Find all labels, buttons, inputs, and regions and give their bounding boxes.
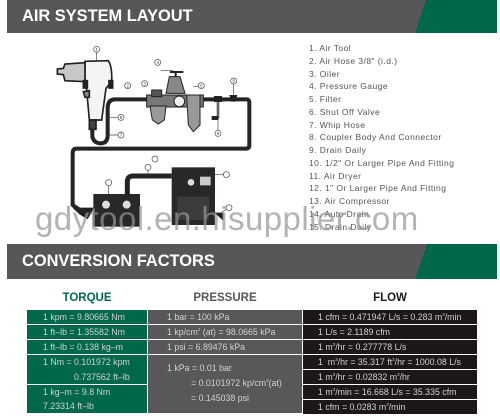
parts list: 13. Air Compressor	[309, 196, 390, 206]
table: pressure: 1 bar = 100 kPa	[167, 312, 229, 322]
callout numbers	[94, 46, 237, 213]
parts list: 9. Drain Daily	[309, 145, 366, 155]
heading: pressure: PRESSURE	[193, 292, 257, 304]
header: air system layout: AIR SYSTEM LAYOUT	[22, 7, 193, 25]
parts list: 11. Air Dryer	[309, 170, 361, 180]
parts list: 3. Oiler	[309, 68, 340, 78]
header: air system layout	[7, 0, 497, 33]
parts list	[309, 43, 454, 232]
table: pressure: 1 kPa = 0.01 bar	[167, 363, 232, 373]
whip hose and air hose	[73, 99, 249, 210]
callout numbers: 7	[120, 133, 123, 138]
watermark: gdytool.en.hisupplier.com	[35, 200, 419, 237]
table: flow: 1 m3/hr = 0.277778 L/s	[318, 342, 406, 352]
table: torque: 1 kpm = 9.80665 Nm	[43, 312, 125, 322]
parts list: 14. Auto Drain	[309, 209, 369, 219]
parts list: 8. Coupler Body And Connector	[309, 132, 442, 142]
icon: auto drain fittings	[74, 208, 223, 220]
table: pressure: = 0.0101972 kp/cm2(at)	[191, 378, 282, 388]
parts list: 7. Whip Hose	[309, 120, 365, 130]
table: torque: 7.23314 ft–lb	[43, 401, 94, 411]
table: flow: 1 m3/min = 16.668 L/s = 35.335 cfm	[318, 387, 456, 397]
icon: oiler, gauge and filter unit	[147, 72, 203, 132]
parts list: 15. Drain Daily	[309, 222, 372, 232]
table: pressure: = 0.145038 psi	[191, 393, 249, 403]
parts list: 1. Air Tool	[309, 43, 351, 53]
table: flow: 1 m3/hr = 35.317 ft3/hr = 1000.08 L/s	[318, 357, 461, 367]
table: flow: 1 m3/hr = 0.02832 m3/hr	[318, 372, 410, 382]
table: pressure: 1 kp/cm2 (at) = 98.0665 kPa	[167, 327, 275, 337]
heading: torque: TORQUE	[62, 292, 112, 304]
table: pressure: 1 psi = 6.89476 kPa	[167, 342, 245, 352]
air system diagram	[56, 46, 252, 227]
callout numbers: 5	[200, 83, 203, 88]
table: torque: 1 Nm = 0.101972 kpm	[43, 357, 130, 367]
icon: air tool	[57, 61, 113, 129]
parts list: 10. 1/2" Or Larger Pipe And Fitting	[309, 158, 454, 168]
parts list: 5. Filter	[309, 94, 341, 104]
callout numbers: 3	[143, 81, 146, 86]
table: torque: 1 ft–lb = 1.35582 Nm	[43, 327, 125, 337]
table: flow: 1 L/s = 2.1189 cfm	[318, 327, 390, 337]
icon: air compressor	[93, 194, 140, 227]
table: flow: 1 cfm = 0.0283 m3/min	[318, 402, 405, 412]
parts list: 12. 1" Or Larger Pipe And Fitting	[309, 183, 446, 193]
table: torque: 0.737562 ft–lb	[74, 372, 130, 382]
heading: flow: FLOW	[373, 292, 407, 304]
table: torque: 1 kg–m = 9.8 Nm	[43, 387, 110, 397]
parts list: 6. Shut Off Valve	[309, 107, 380, 117]
parts list: 2. Air Hose 3/8" (i.d.)	[309, 56, 397, 66]
icon: drain valve and shut off valve	[212, 95, 237, 120]
callout numbers: 6	[232, 79, 235, 84]
header: conversion factors: CONVERSION FACTORS	[22, 252, 215, 270]
callout numbers: 8	[120, 115, 123, 120]
table: flow: 1 cfm = 0.471947 L/s = 0.283 m3/min	[318, 312, 461, 322]
callout numbers: 4	[156, 60, 159, 65]
table: torque: 1 ft–lb = 0.138 kg–m	[43, 342, 123, 352]
parts list: 4. Pressure Gauge	[309, 81, 388, 91]
callout numbers: 2	[126, 83, 129, 88]
header: conversion factors	[7, 244, 497, 279]
callout numbers: 1	[95, 47, 98, 52]
callout numbers: 9	[217, 131, 220, 136]
icon: air dryer	[172, 167, 215, 225]
